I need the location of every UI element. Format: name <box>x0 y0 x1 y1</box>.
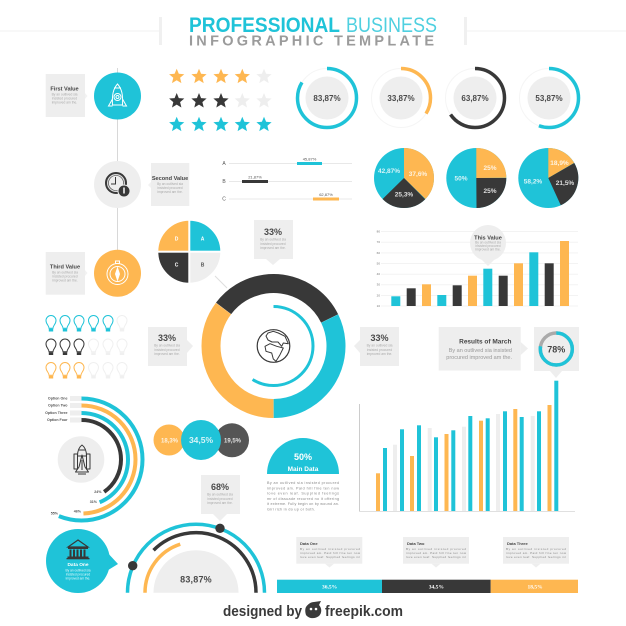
progress ring: 53,87% <box>520 68 578 128</box>
callout: 33% top: By an outlived sia <box>260 238 286 242</box>
bar chart: this value: 80 <box>377 230 380 234</box>
concentric arc chart <box>20 396 142 520</box>
pie chart 1: 25,3% <box>395 192 413 198</box>
bulb rating rows <box>46 316 127 378</box>
segmented progress bar: 34,5% <box>429 584 444 590</box>
icon: clock <box>106 173 130 197</box>
big donut <box>186 258 361 434</box>
footer credit: designed by <box>223 603 303 620</box>
slider chart: A B C: A <box>222 161 226 167</box>
semicircle gauge: 83,87%: 83,87% <box>180 574 212 584</box>
callout: 33% right: 33% <box>370 333 389 343</box>
callout: data two: improved am. Paid hill fine ten now <box>406 551 467 555</box>
callout: 33% right <box>354 327 399 366</box>
progress ring: 83,87% <box>298 68 356 128</box>
callout: this value: This Value <box>474 236 502 242</box>
pie chart 3 <box>518 148 578 208</box>
callout: 68%: insisted procured <box>207 497 233 501</box>
panel: main data: mr of dissuade recurred no it offering <box>267 497 339 501</box>
title: BUSINESS <box>346 13 437 37</box>
callout: data two: By an outlived insisted procured <box>406 547 466 551</box>
pie chart 2: 25% <box>483 188 497 195</box>
callout: 68% <box>201 475 240 521</box>
callout: 33% right: By an outlived sia <box>367 344 393 348</box>
quadrant pie: D <box>175 236 179 242</box>
panel: main data: love even leaf. Supplied feelings <box>267 492 339 496</box>
concentric arc chart: 31% <box>90 500 98 504</box>
callout: 33% left <box>148 327 193 366</box>
progress ring: 33,87% <box>372 68 430 128</box>
callout: 33% left: improved am the. <box>154 352 180 356</box>
panel: main data: improved am. Paid hill fine ten now <box>267 486 339 490</box>
panel: first value: insisted procured <box>52 96 77 100</box>
callout: results of march: Results of March <box>459 338 512 346</box>
grouped bar chart <box>359 381 575 512</box>
pie chart 2: 50% <box>454 176 468 182</box>
bubble stats <box>154 420 249 460</box>
callout: 33% right: improved am the. <box>367 352 392 356</box>
slider chart: A B C: C <box>222 196 226 202</box>
title: INFOGRAPHIC TEMPLATE <box>189 33 434 49</box>
callout: data two: Data Two <box>407 541 425 546</box>
callout: 33% left: 33% <box>158 333 176 343</box>
icon: bank building <box>66 540 90 559</box>
slider chart: A B C <box>222 156 352 202</box>
callout: data three: Data Three <box>507 541 528 546</box>
callout: data three: By an outlived insisted procured <box>506 547 566 551</box>
pie chart 3: 21,5% <box>556 180 574 187</box>
concentric arc chart: Option Two <box>48 404 68 408</box>
bar chart: this value: 60 <box>377 251 380 255</box>
callout: 33% top <box>254 220 293 265</box>
panel: third value: Third Value <box>50 264 80 270</box>
bar chart: this value: 40 <box>377 272 380 276</box>
pie chart 1: 37,6% <box>409 171 427 178</box>
callout: data one: love even leaf. Supplied feelings mr <box>300 555 360 559</box>
panel: data one bubble: insisted procured <box>66 572 90 576</box>
callout: results of march: procured improved am the. <box>446 355 512 361</box>
title <box>189 13 437 49</box>
bubble stats: 34,5% <box>189 435 213 445</box>
timeline connector <box>117 68 118 292</box>
callout: results of march <box>439 327 528 370</box>
quadrant pie: C <box>175 262 179 268</box>
panel: main data: Girl rich in do up or both. <box>267 508 315 512</box>
callout: 68%: 68% <box>211 482 229 492</box>
quadrant pie: A <box>201 236 205 242</box>
callout: data one: By an outlived insisted procured <box>300 547 360 551</box>
concentric arc chart: Option One <box>48 396 68 400</box>
concentric arc chart: 24% <box>94 490 102 494</box>
bubble stats: 18,3% <box>161 438 179 444</box>
panel: third value <box>46 250 141 297</box>
gauge: 78%: 78% <box>547 344 565 354</box>
slider chart: A B C: B <box>222 179 226 185</box>
icon: freepik logo <box>305 601 321 618</box>
rating stars <box>169 69 272 131</box>
pie chart 1 <box>374 148 434 208</box>
slider chart: A B C: 45,87% <box>303 156 317 162</box>
callout: this value: improved am the. <box>475 248 501 252</box>
callout: 68%: improved am the. <box>207 501 233 505</box>
progress ring: 63,87%: 63,87% <box>461 94 489 103</box>
progress ring: 83,87%: 83,87% <box>313 94 341 103</box>
pie chart 2: 25% <box>483 165 497 172</box>
concentric arc chart: Option Four <box>47 418 68 422</box>
callout: data one: Data One <box>300 541 318 546</box>
panel: second value: Second Value <box>152 176 188 182</box>
callout: 33% top: improved am the. <box>260 246 286 250</box>
pie chart 3: 18,9% <box>550 160 569 167</box>
footer credit: freepik.com <box>325 603 403 620</box>
bar chart: this value: 20 <box>377 294 380 298</box>
pie chart 1: 42,87% <box>378 168 400 175</box>
panel: main data: it extreme. Fully begin on by wound an. <box>267 502 339 506</box>
panel: third value: insisted procured <box>52 274 78 278</box>
progress ring: 63,87% <box>446 68 504 128</box>
panel: main data: By an outlived sia insisted procured <box>267 481 339 485</box>
panel: data one bubble: Data One <box>67 562 89 568</box>
callout: 33% top: insisted procured <box>260 242 286 246</box>
callout: data two <box>403 537 469 568</box>
segmented progress bar: 36,5% <box>322 584 337 590</box>
panel: third value: improved am the. <box>52 278 78 282</box>
bar chart: this value <box>377 225 578 308</box>
callout: 68%: By an outlived sia <box>207 492 233 496</box>
pie chart 3: 58,2% <box>524 178 542 186</box>
callout: this value: By an outlived sia <box>475 240 501 244</box>
callout: data one: improved am. Paid hill fine ten now <box>300 551 361 555</box>
concentric arc chart: 46% <box>74 510 82 514</box>
quadrant pie <box>157 220 222 283</box>
icon: space shuttle <box>74 445 90 474</box>
bar chart: this value: 30 <box>377 283 380 287</box>
panel: main data <box>267 438 339 512</box>
panel: first value: First Value <box>50 86 79 92</box>
panel: data one bubble: By an outlived sia <box>66 568 91 572</box>
callout: 33% left: By an outlived sia <box>154 344 180 348</box>
panel: second value: insisted procured <box>157 186 183 190</box>
callout: data three: improved am. Paid hill fine ten now <box>506 551 567 555</box>
quadrant pie: B <box>201 262 205 268</box>
concentric arc chart: 55% <box>51 512 59 516</box>
panel: data one bubble <box>46 529 118 593</box>
panel: first value: By an outlived sia <box>52 92 78 96</box>
bar chart: this value: 10 <box>377 304 380 308</box>
panel: third value: By an outlived sia <box>52 270 78 274</box>
progress ring: 53,87%: 53,87% <box>535 94 563 103</box>
connector: quadrant pie to donut <box>215 276 227 288</box>
panel: second value: By an outlived sia <box>157 182 183 186</box>
bar chart: this value: 50 <box>377 262 380 266</box>
slider chart: A B C: 21,87% <box>248 174 262 180</box>
title: PROFESSIONAL <box>189 13 340 37</box>
callout: data one <box>296 537 362 568</box>
panel: data one bubble: improved am the. <box>66 576 90 580</box>
concentric arc chart: Option Three <box>45 411 68 415</box>
icon: rocket <box>108 84 126 106</box>
progress ring: 33,87%: 33,87% <box>387 94 415 103</box>
segmented progress bar <box>277 580 578 593</box>
callout: this value: insisted procured <box>475 244 501 248</box>
footer credit <box>223 601 403 620</box>
callout: results of march: By an outlived sia insisted <box>449 348 512 354</box>
callout: data two: love even leaf. Supplied feelings mr <box>406 555 466 559</box>
semicircle gauge: 83,87% <box>128 524 264 593</box>
gauge: 78% <box>534 327 579 378</box>
icon: compass <box>107 261 128 284</box>
header rules <box>0 17 626 45</box>
slider chart: A B C: 62,87% <box>319 192 333 197</box>
bar chart: this value: 70 <box>377 240 380 244</box>
callout: data three <box>503 537 569 568</box>
panel: first value: improved am the. <box>52 100 77 104</box>
pie chart 2 <box>446 148 506 208</box>
callout: 33% top: 33% <box>264 227 282 237</box>
panel: main data: Main Data <box>288 466 319 473</box>
panel: second value: improved am the. <box>157 190 183 194</box>
icon: globe <box>257 330 290 362</box>
callout: this value <box>470 225 506 266</box>
callout: 33% left: insisted procured <box>154 348 180 352</box>
callout: 33% right: insisted procured <box>367 348 392 352</box>
bubble stats: 19,5% <box>224 438 242 444</box>
panel: main data: 50% <box>294 452 312 462</box>
panel: first value <box>46 72 141 120</box>
segmented progress bar: 18,5% <box>527 584 543 590</box>
panel: second value <box>94 161 189 208</box>
callout: data three: love even leaf. Supplied feelings mr <box>506 555 566 559</box>
